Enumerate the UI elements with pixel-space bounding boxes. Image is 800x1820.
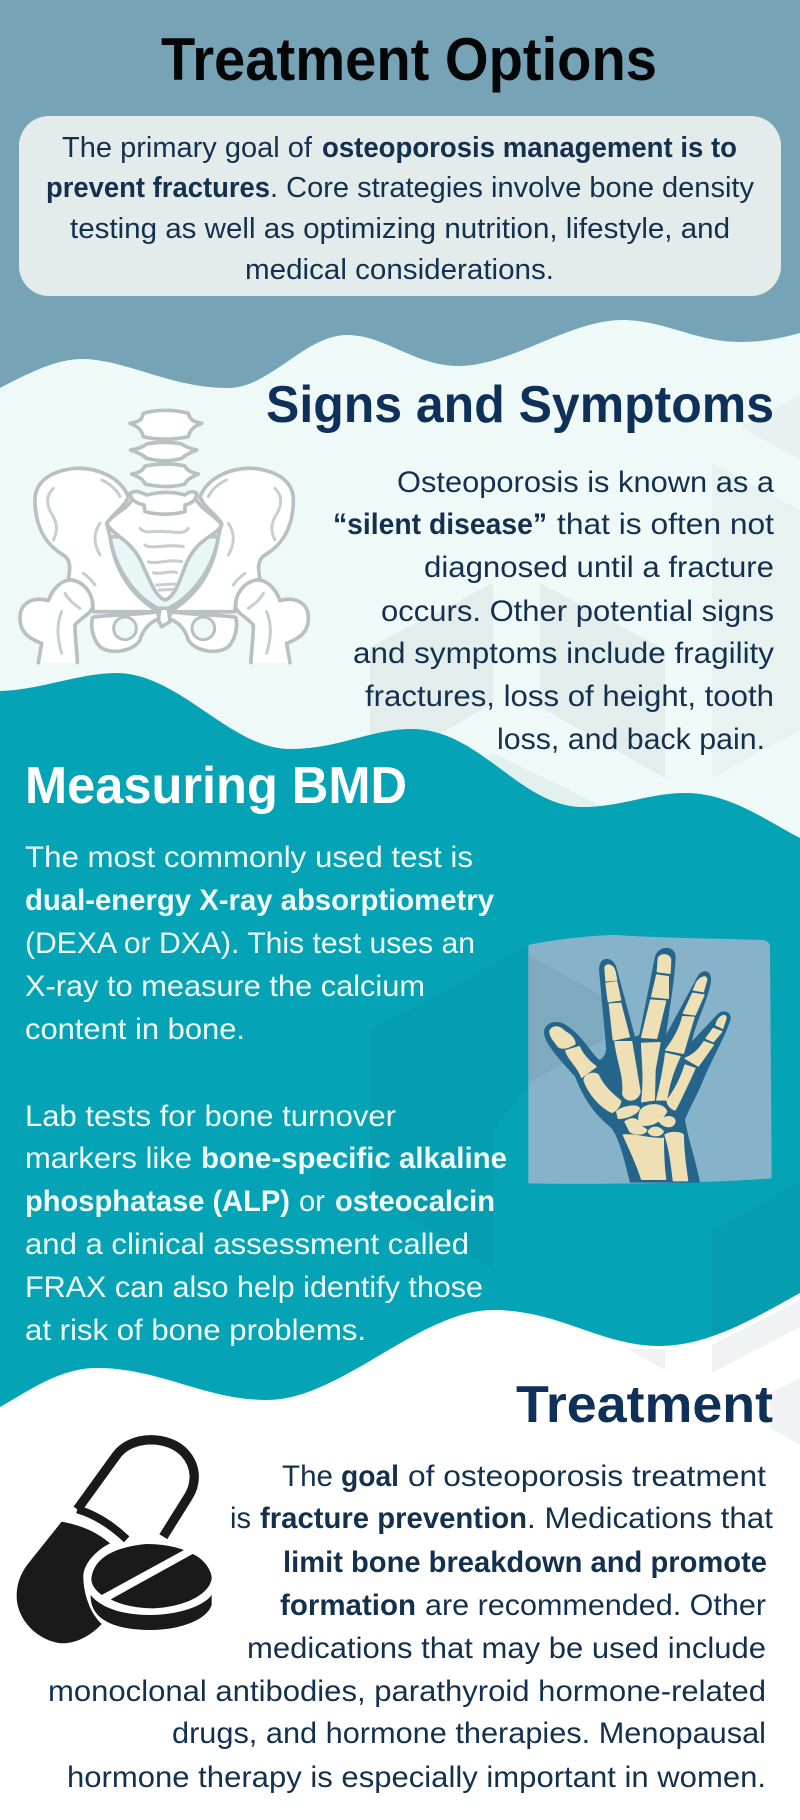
heading: measuring BMD: Measuring BMD (25, 757, 407, 815)
icon: x-ray hand (528, 935, 772, 1184)
treatment body text: of osteoporosis treatment (408, 1460, 766, 1493)
treatment body text: goal (341, 1460, 399, 1493)
DEXA paragraph: content in bone. (25, 1013, 245, 1046)
title: Treatment Options (161, 26, 657, 93)
intro line 2: prevent fractures (46, 172, 270, 204)
panel: measuring BMD (25, 757, 772, 1347)
intro line 1 (62, 132, 737, 164)
signs body text: that is often not (557, 508, 774, 541)
lab tests paragraph: FRAX can also help identify those (25, 1271, 483, 1304)
lab tests paragraph: osteocalcin (335, 1185, 495, 1218)
treatment body text: monoclonal antibodies, parathyroid hormone-related (48, 1675, 766, 1708)
treatment body text: . Medications that (527, 1502, 773, 1535)
treatment body text (48, 1460, 773, 1794)
signs body text: fractures, loss of height, tooth (365, 680, 774, 713)
lab tests paragraph: Lab tests for bone turnover (25, 1100, 396, 1133)
lab tests paragraph: phosphatase (ALP) (25, 1185, 290, 1218)
signs body text (333, 466, 775, 756)
intro line 1: osteoporosis management is to (322, 132, 737, 164)
treatment body text: formation (280, 1589, 416, 1622)
DEXA paragraph: dual-energy X-ray absorptiometry (25, 884, 495, 917)
signs body text: loss, and back pain. (497, 723, 765, 756)
panel: signs and symptoms (20, 376, 775, 756)
treatment body text: medications that may be used include (247, 1632, 766, 1665)
panel: treatment (17, 1376, 773, 1794)
treatment body text: is (230, 1502, 251, 1535)
treatment body text: limit bone breakdown and promote (283, 1546, 767, 1579)
panel: intro (19, 116, 781, 296)
treatment body text: The (282, 1460, 333, 1493)
lab tests paragraph: bone-specific alkaline (201, 1142, 507, 1175)
DEXA paragraph (25, 841, 495, 1046)
intro line 2: . Core strategies involve bone density (270, 172, 754, 204)
signs body text: “silent disease” (333, 508, 547, 541)
signs body text: diagnosed until a fracture (424, 551, 774, 584)
lab tests paragraph: at risk of bone problems. (25, 1314, 366, 1347)
treatment body text: are recommended. Other (425, 1589, 766, 1622)
heading: signs and symptoms: Signs and Symptoms (266, 376, 774, 434)
icon: capsule and tablet (17, 1440, 212, 1643)
DEXA paragraph: The most commonly used test is (25, 841, 473, 874)
lab tests paragraph: and a clinical assessment called (25, 1228, 469, 1261)
DEXA paragraph: X-ray to measure the calcium (25, 970, 425, 1003)
treatment body text: fracture prevention (260, 1502, 527, 1535)
signs body text: occurs. Other potential signs (381, 595, 774, 628)
icon: pelvis skeleton (20, 410, 308, 663)
signs body text: Osteoporosis is known as a (397, 466, 775, 499)
lab tests paragraph (25, 1100, 507, 1347)
intro line 1: The primary goal of (62, 132, 313, 164)
heading: treatment: Treatment (516, 1376, 773, 1434)
intro line 2 (46, 172, 754, 204)
lab tests paragraph: or (299, 1185, 325, 1218)
treatment body text: drugs, and hormone therapies. Menopausal (172, 1717, 766, 1750)
treatment body text: hormone therapy is especially important in women. (67, 1761, 766, 1794)
intro line 4: medical considerations. (245, 254, 554, 286)
DEXA paragraph: (DEXA or DXA). This test uses an (25, 927, 475, 960)
intro line 3: testing as well as optimizing nutrition, lifestyle, and (70, 213, 730, 245)
lab tests paragraph: markers like (25, 1142, 192, 1175)
signs body text: and symptoms include fragility (353, 637, 774, 670)
